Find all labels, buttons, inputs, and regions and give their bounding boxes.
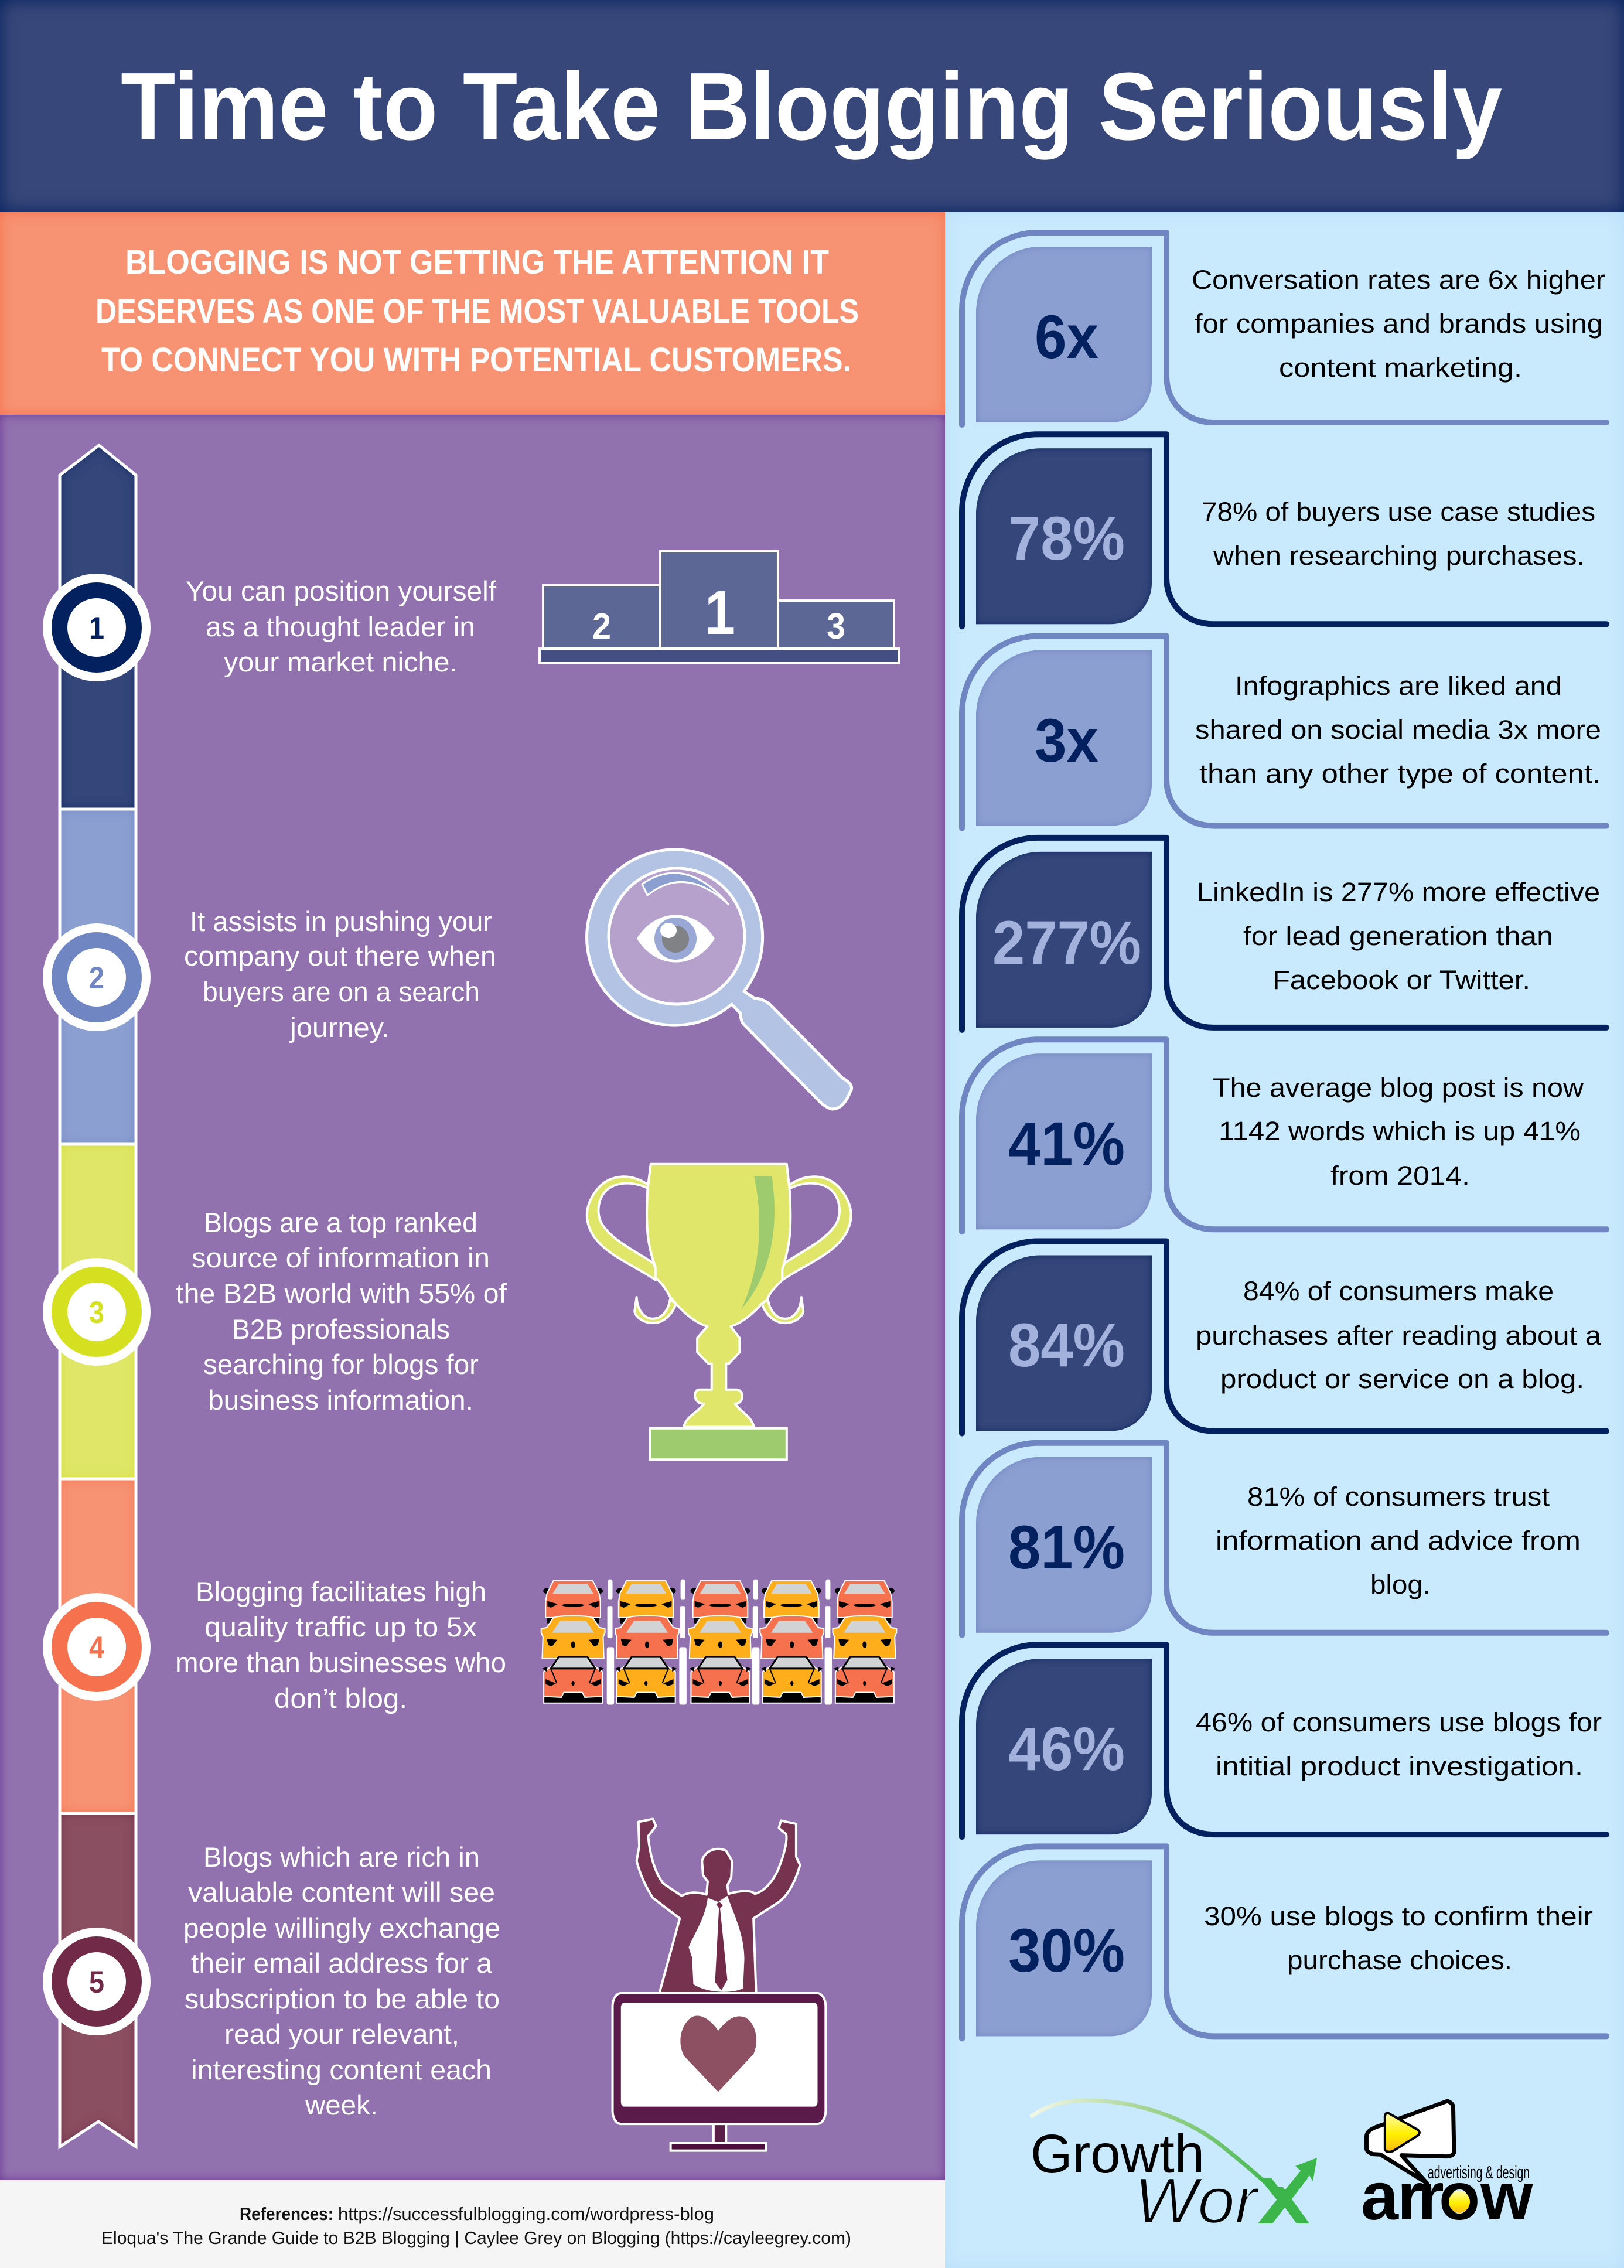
stat card: 84%: 84% [1008, 1311, 1125, 1380]
badge 1: 1 [89, 611, 104, 646]
stat card: 81%: information and advice from [1216, 1526, 1581, 1556]
text: point 5: interesting content each [191, 2054, 492, 2085]
stat card: 3x: Infographics are liked and [1235, 671, 1562, 701]
text: point 3: business information. [208, 1384, 473, 1416]
logo: arrow advertising and design: arrow [1361, 2159, 1533, 2234]
text: point 2: buyers are on a search [203, 976, 480, 1007]
references text: Eloqua's The Grande Guide to B2B Blogging | Caylee Grey on Blogging (https://cayleegrey.com) [101, 2228, 851, 2248]
logo: GrowthWorX [1031, 2100, 1317, 2238]
stat card: 81%: 81% of consumers trust [1247, 1482, 1550, 1512]
text: point 5 [183, 1841, 500, 2120]
stat card: 41%: 1142 words which is up 41% [1219, 1116, 1581, 1146]
stat card: 277% [962, 838, 1606, 1030]
icon: trophy [587, 1164, 851, 1459]
stat card: 6x [962, 233, 1606, 425]
logo: arrow advertising and design [1361, 2101, 1533, 2234]
logo: GrowthWorX: X [1257, 2164, 1310, 2238]
icon: businessman cheering above monitor with heart [613, 1819, 825, 2151]
text: point 3: searching for blogs for [203, 1349, 479, 1380]
intro text: TO CONNECT YOU WITH POTENTIAL CUSTOMERS. [101, 341, 851, 379]
stat card: 30% [962, 1846, 1606, 2038]
badge 5 [43, 1928, 151, 2035]
text: point 4: more than businesses who [175, 1647, 506, 1678]
text: point 5: week. [305, 2089, 378, 2120]
icon: magnifying glass with eye [587, 850, 852, 1109]
badge 3: 3 [89, 1295, 104, 1330]
badge 3 [43, 1258, 151, 1366]
stat card: 6x: 6x [1035, 303, 1098, 371]
stat card: 41% [962, 1039, 1606, 1232]
stat card: 3x: than any other type of content. [1199, 759, 1601, 789]
icon: traffic of cars [541, 1580, 896, 1705]
text: point 5: read your relevant, [224, 2018, 459, 2049]
intro text [95, 243, 859, 379]
badge 2: 2 [89, 961, 104, 995]
text: point 4: don’t blog. [274, 1683, 407, 1714]
icon: podium [540, 551, 899, 663]
text: point 4 [175, 1576, 506, 1714]
text: point 3: B2B professionals [232, 1314, 450, 1345]
stat card: 84%: product or service on a blog. [1220, 1364, 1584, 1394]
stat card: 41%: 41% [1008, 1110, 1125, 1178]
badge 2 [43, 923, 151, 1031]
stat card: 46%: 46% of consumers use blogs for [1196, 1707, 1602, 1737]
logo: GrowthWorX: Growth [1031, 2123, 1205, 2184]
stat card: 46%: 46% [1008, 1715, 1125, 1783]
text: point 5: Blogs which are rich in [203, 1841, 480, 1873]
intro text: BLOGGING IS NOT GETTING THE ATTENTION IT [125, 243, 829, 281]
text: point 2: It assists in pushing your [190, 906, 492, 937]
stat card: 81% [962, 1443, 1606, 1635]
stat card: 277%: for lead generation than [1243, 921, 1553, 951]
stat card: 78% [962, 434, 1606, 626]
text: point 1 [186, 575, 497, 677]
text: point 4: Blogging facilitates high [196, 1576, 486, 1607]
badge 4: 4 [89, 1631, 104, 1665]
stat card: 277%: 277% [992, 909, 1141, 977]
text: point 1: your market niche. [224, 646, 458, 677]
text: point 2: journey. [289, 1012, 390, 1043]
stat card: 6x: for companies and brands using [1195, 309, 1603, 339]
stat card: 78%: 78% of buyers use case studies [1202, 497, 1595, 527]
text: point 3 [176, 1207, 507, 1416]
panel: intro banner [0, 212, 945, 415]
stat card: 46% [962, 1645, 1606, 1837]
badge 1 [43, 574, 151, 681]
text: point 5: valuable content will see [188, 1877, 495, 1908]
title: Time to Take Blogging Seriously [121, 53, 1502, 160]
references text: https://successfulblogging.com/wordpress-blog [338, 2204, 714, 2224]
panel: right statistics column [945, 212, 1624, 2268]
stat card: 84%: purchases after reading about a [1196, 1321, 1602, 1350]
badge 5: 5 [89, 1965, 104, 2000]
stat card: 30%: 30% use blogs to confirm their [1204, 1901, 1593, 1931]
text: point 1: You can position yourself [186, 575, 497, 606]
stat card: 277%: LinkedIn is 277% more effective [1197, 877, 1600, 907]
text: point 3: Blogs are a top ranked [204, 1207, 477, 1238]
panel: left purple list [0, 415, 945, 2180]
logo: arrow advertising and design: advertising & design [1428, 2162, 1530, 2182]
stat card: 3x: 3x [1035, 707, 1098, 775]
stat card: 84% [962, 1241, 1606, 1433]
references text: References: [240, 2204, 333, 2224]
stat card: 84%: 84% of consumers make [1243, 1276, 1554, 1306]
text: point 1: as a thought leader in [206, 611, 475, 642]
references text [101, 2204, 851, 2248]
stat card: 6x: content marketing. [1279, 353, 1522, 383]
stat card: 78%: when researching purchases. [1213, 541, 1585, 571]
panel: references footer [0, 2180, 945, 2268]
text: point 5: subscription to be able to [185, 1983, 500, 2014]
stat card: 6x: Conversation rates are 6x higher [1192, 265, 1605, 295]
stat card: 46%: intitial product investigation. [1216, 1751, 1583, 1781]
panel: title header [0, 0, 1624, 212]
text: point 4: quality traffic up to 5x [204, 1611, 477, 1642]
stat card: 78%: 78% [1008, 504, 1125, 573]
text: point 5: people willingly exchange [183, 1912, 500, 1943]
stat card: 41%: from 2014. [1330, 1161, 1470, 1191]
logo: GrowthWorX: Wor [1134, 2165, 1260, 2237]
stat card: 41%: The average blog post is now [1213, 1073, 1584, 1103]
stat card: 277%: Facebook or Twitter. [1272, 965, 1530, 995]
stat card: 3x [962, 636, 1606, 828]
stat card: 3x: shared on social media 3x more [1195, 715, 1601, 745]
ribbon timeline [43, 445, 151, 2147]
text: point 3: source of information in [192, 1242, 490, 1273]
icon: podium: 1 [705, 578, 735, 647]
stat card: 30%: 30% [1008, 1916, 1125, 1985]
badge 4 [43, 1593, 151, 1701]
icon: podium: 3 [827, 606, 845, 647]
stat card: 30%: purchase choices. [1287, 1945, 1512, 1975]
stat card: 81%: 81% [1008, 1513, 1125, 1582]
text: point 3: the B2B world with 55% of [176, 1278, 507, 1309]
text: point 5: their email address for a [191, 1948, 493, 1979]
text: point 2: company out there when [184, 940, 496, 971]
stat card: 81%: blog. [1370, 1570, 1431, 1599]
icon: podium: 2 [592, 606, 611, 647]
text: point 2 [184, 906, 496, 1043]
